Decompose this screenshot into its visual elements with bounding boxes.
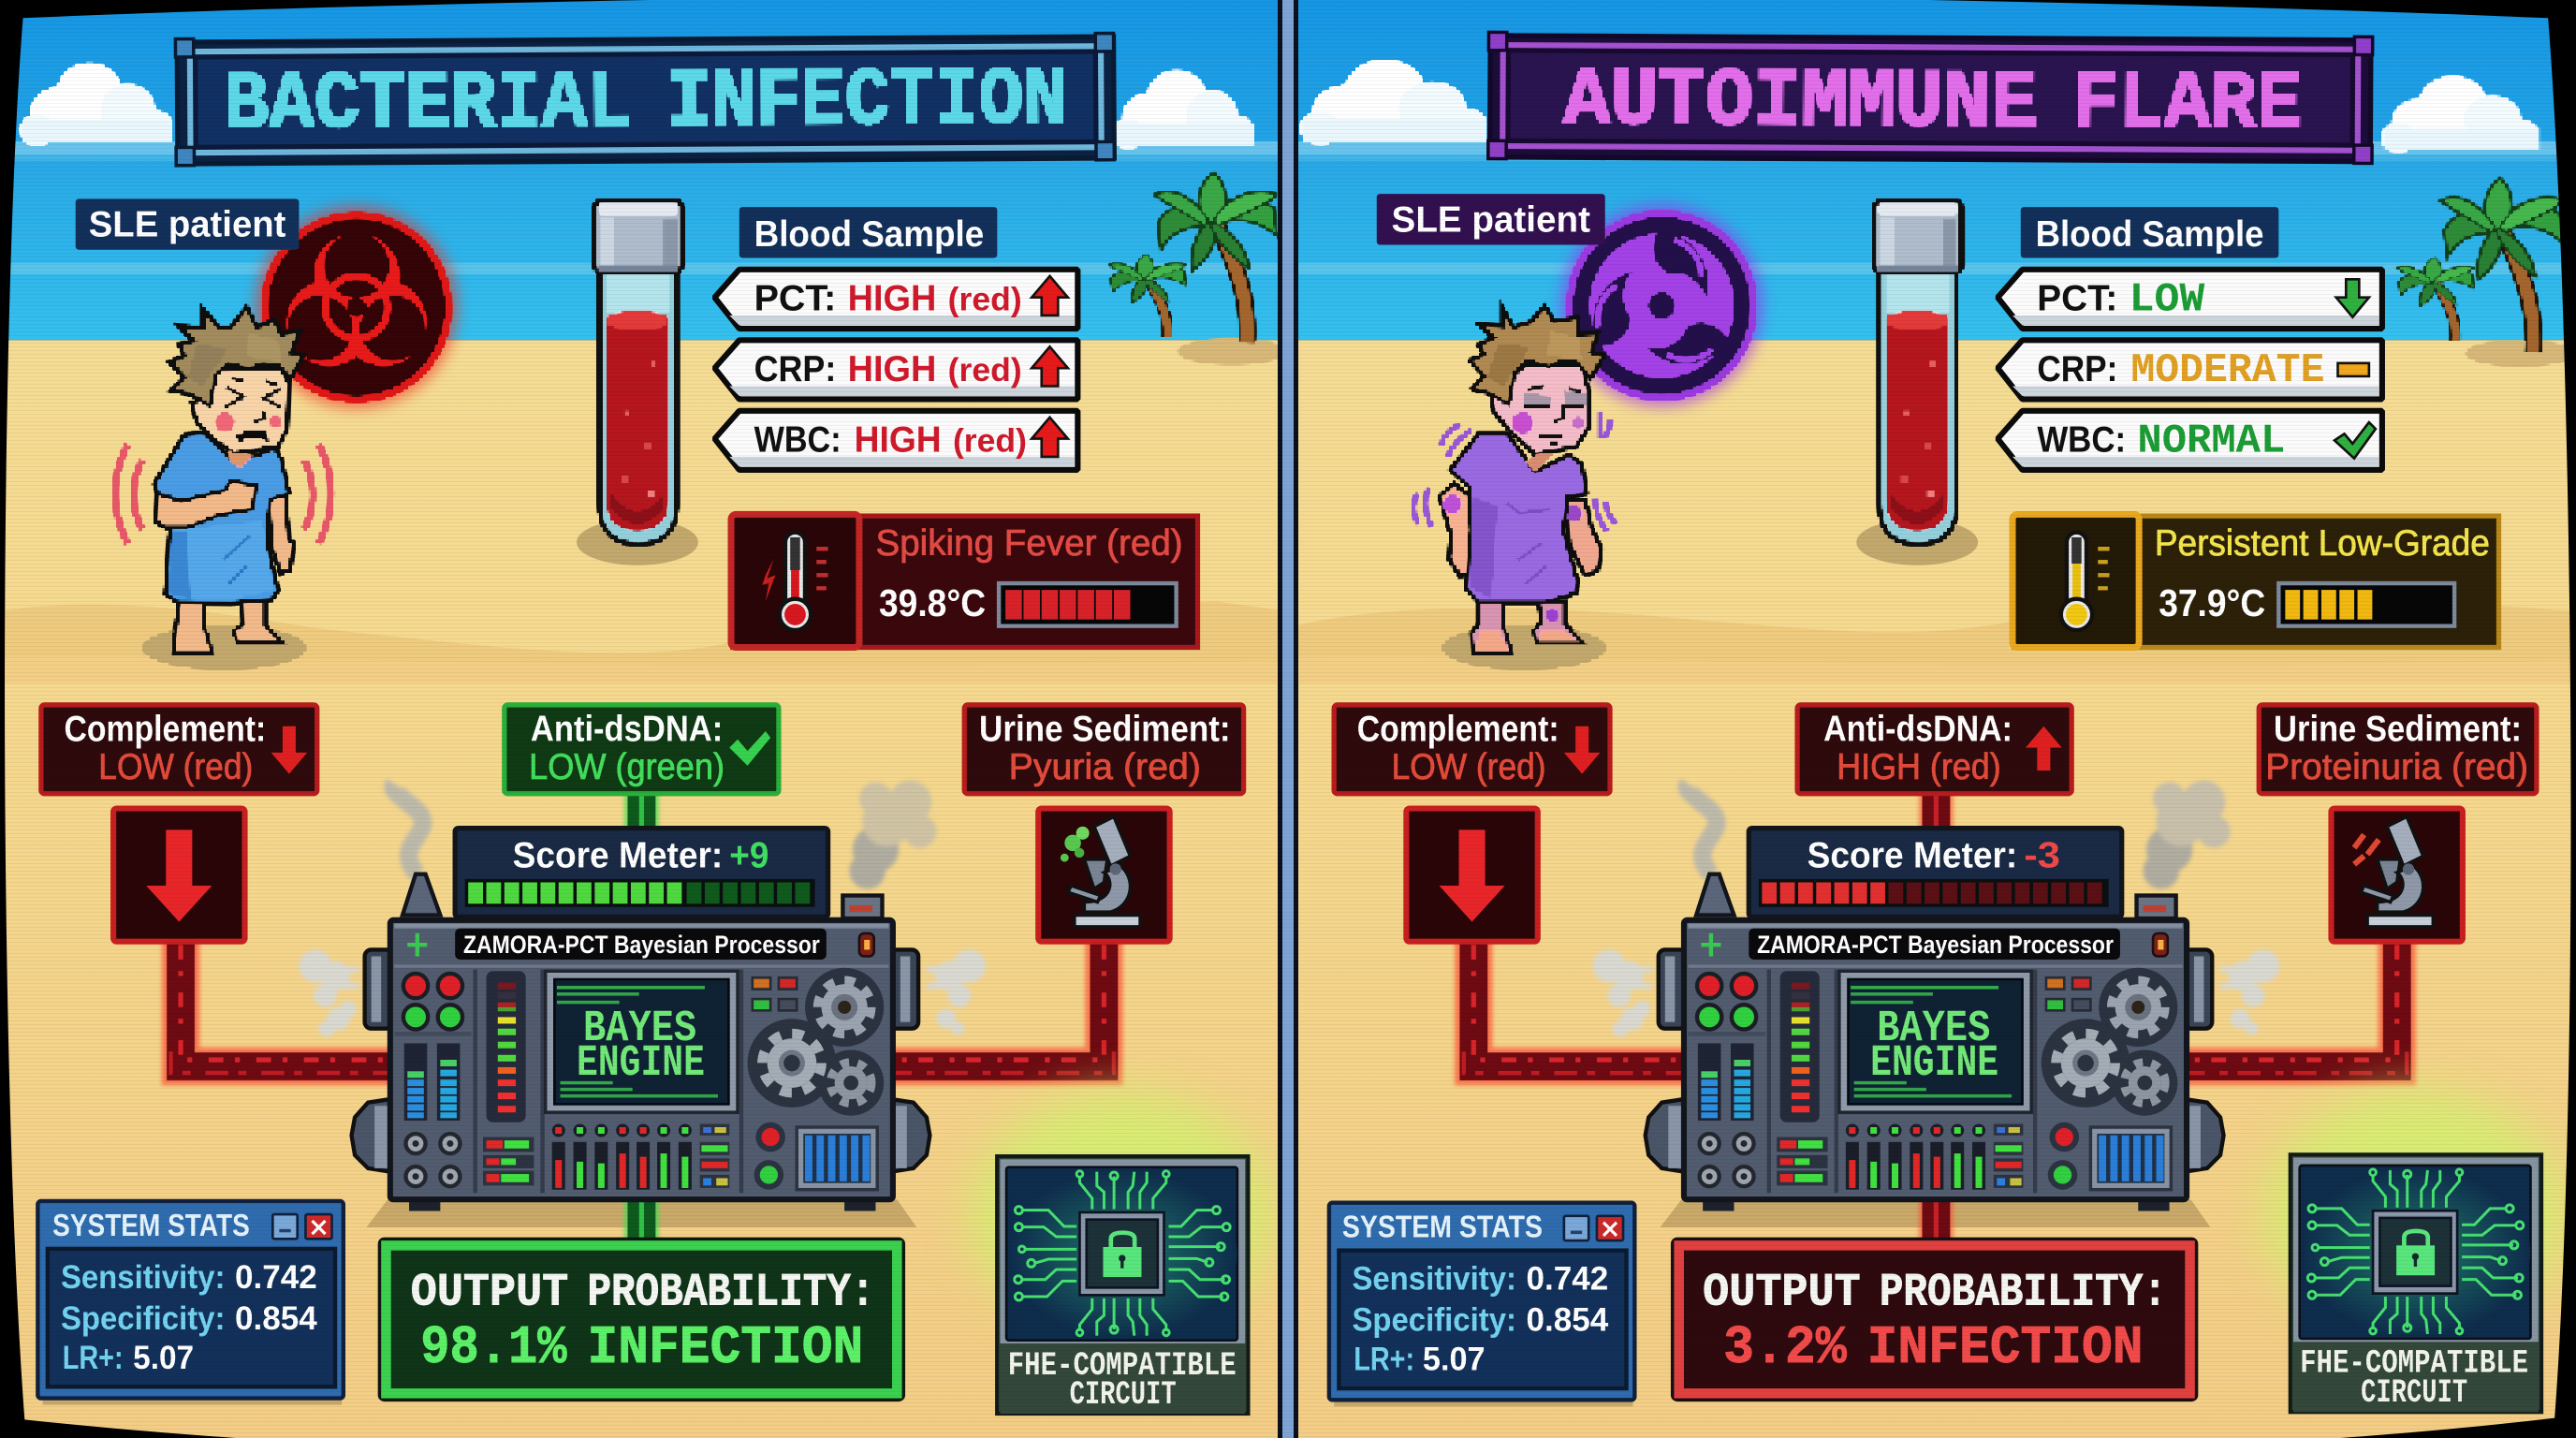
label: SLE patient (left): SLE patient [89,205,286,245]
tag: WBC high: WBC: [754,420,842,461]
machine: Bayes engine (right): ZAMORA-PCT Bayesian Processor [1757,930,2114,959]
panel: complement low (right) [1334,705,1610,794]
panel: anti-dsDNA high: HIGH (red) [1837,747,2001,787]
panel: urine sediment proteinuria: Urine Sediment: [2274,710,2522,750]
panel: FHE-compatible circuit (right): FHE-COMPATIBLE [2300,1345,2528,1383]
panel: anti-dsDNA low: LOW (green) [529,747,724,787]
icon: autoimmune swirl badge [1559,204,1764,407]
panel: system stats (left): 5.07 [133,1340,194,1376]
panel: system stats (left): Sensitivity: [61,1259,225,1296]
panel: output probability 98.1%: PROBABILITY: [587,1267,875,1319]
panel: FHE-compatible circuit (right): CIRCUIT [2361,1374,2467,1412]
panel: FHE-compatible circuit (left) [971,1093,1273,1414]
tag: CRP moderate: CRP: [2037,349,2117,389]
title: autoimmune flare [1488,32,2373,163]
conduit: right red connectors [1464,792,2407,1242]
panel: spiking fever [731,514,1197,648]
tag: WBC normal: WBC: [2037,420,2126,461]
tag: WBC normal: NORMAL [2137,418,2285,465]
icon: blood test tube (right) [1856,200,1978,565]
panel: system stats (right) [1329,1203,1634,1406]
tag: CRP high [714,340,1077,399]
panel: urine sediment pyuria [964,705,1244,794]
panel: output probability 98.1%: OUTPUT [411,1267,568,1319]
panel: anti-dsDNA low [505,705,779,794]
panel: complement low (right): Complement: [1357,710,1559,750]
center divider between the two scenarios [1278,0,1298,1438]
tag: CRP moderate: MODERATE [2130,347,2324,394]
panel: output probability 3.2%: INFECTION [1867,1318,2144,1379]
label: SLE patient (right) [1377,194,1605,245]
tag: CRP moderate [1998,340,2382,399]
title: bacterial infection [175,34,1114,166]
smoke and steam (right) [1593,781,2279,1036]
tag: WBC high: (red) [953,423,1027,460]
panel: system stats (left): Specificity: [61,1300,225,1337]
tag: PCT high: PCT: [754,279,836,319]
panel: output probability 3.2%: OUTPUT [1703,1267,1861,1319]
panel: persistent low-grade fever: 37.9°C [2159,581,2265,624]
title: bacterial infection: INFECTION [666,55,1068,150]
panel: output probability 98.1%: INFECTION [587,1318,863,1379]
panel: complement low (right): LOW (red) [1392,747,1546,787]
panel: system stats (left): 0.742 [235,1259,317,1296]
machine: Bayes engine (right): ENGINE [1870,1039,1998,1089]
tag: PCT high [714,270,1077,329]
tag: CRP high: HIGH [848,349,936,389]
label: blood sample (right): Blood Sample [2036,214,2264,255]
panel: system stats (right): SYSTEM STATS [1342,1211,1543,1245]
tag: CRP high: (red) [948,352,1022,389]
title: autoimmune flare: FLARE [2072,58,2303,152]
icon: yellow thermometer [2061,533,2110,630]
tag: WBC normal [1998,411,2382,470]
label: SLE patient (right): SLE patient [1392,199,1590,240]
panel: score meter -3: -3 [2024,836,2060,876]
panel: system stats (left): 0.854 [235,1300,317,1337]
panel: system stats (left): SYSTEM STATS [52,1209,250,1243]
panel: output probability 98.1% [379,1239,903,1400]
title: bacterial infection: BACTERIAL [223,57,633,153]
tag: PCT low: PCT: [2037,279,2117,319]
tag: WBC high [714,411,1077,470]
figure: feverish patient in blue gown [115,307,331,669]
panel: FHE-compatible circuit (right) [2264,1091,2566,1412]
panel: system stats (right): Sensitivity: [1352,1261,1516,1298]
panel: urine sediment pyuria: Urine Sediment: [979,710,1231,750]
panel: system stats (right): 0.854 [1526,1302,1609,1339]
panel: persistent low-grade fever: Persistent Low-Grade [2155,523,2490,564]
panel: urine sediment pyuria: Pyuria (red) [1009,747,1201,787]
machine: Bayes engine (right): BAYES [1877,1005,1990,1054]
clouds and palm trees: right [1299,60,2574,366]
background: left beach scene [0,0,1288,1438]
panel: system stats (left) [37,1201,344,1405]
panel: urine sediment proteinuria [2259,705,2537,794]
panel: spiking fever: Spiking Fever (red) [875,523,1183,564]
panel: complement low (left): Complement: [64,710,266,750]
panel: output probability 3.2%: PROBABILITY: [1880,1267,2167,1319]
machine: Bayes engine (left) [352,920,929,1211]
chimneys (right) [1696,874,2176,918]
tag: CRP high: CRP: [754,349,836,389]
conduit: left red connectors [171,936,1114,1073]
icon: biohazard badge [255,205,459,409]
clouds and palm trees: left [20,63,1286,365]
panel: FHE-compatible circuit (left): CIRCUIT [1070,1376,1177,1414]
panel: score meter +9: +9 [729,836,768,876]
panel: persistent low-grade fever [2012,514,2499,648]
panel: system stats (right): Specificity: [1352,1302,1516,1339]
panel: anti-dsDNA high [1797,705,2071,794]
panel: complement low (left): LOW (red) [98,747,253,787]
icon: microscope with green cells [1038,809,1170,942]
background: right beach scene [1288,0,2576,1438]
panel: system stats (left): LR+: [63,1340,124,1376]
icon: big down arrow (left) [113,809,245,942]
panel: system stats (right): 5.07 [1423,1342,1486,1378]
tag: PCT high: (red) [948,282,1022,318]
machine: Bayes engine (left): ENGINE [577,1039,705,1089]
machine: Bayes engine (left): BAYES [583,1005,696,1054]
panel: score meter +9 [455,829,828,917]
icon: big down arrow (right) [1406,809,1538,942]
tag: PCT low [1998,270,2382,329]
panel: output probability 3.2% [1673,1239,2197,1400]
panel: system stats (right): 0.742 [1526,1261,1608,1298]
panel: urine sediment proteinuria: Proteinuria (red) [2265,747,2528,787]
machine base shadow (right) [1661,1199,2210,1227]
panel: output probability 98.1%: 98.1% [420,1318,567,1379]
figure: fatigued patient in purple gown [1413,306,1616,669]
smoke and steam (left) [299,781,986,1036]
icon: blood test tube (left) [577,200,698,565]
panel: output probability 3.2%: 3.2% [1723,1318,1847,1379]
title: autoimmune flare: AUTOIMMUNE [1563,55,2038,151]
machine: Bayes engine (left): ZAMORA-PCT Bayesian Processor [463,930,820,959]
label: blood sample (left): Blood Sample [754,214,984,255]
panel: score meter +9: Score Meter: [513,836,723,876]
panel: anti-dsDNA high: Anti-dsDNA: [1823,710,2012,750]
chimneys (left) [402,874,882,918]
tag: WBC high: HIGH [855,420,942,461]
panel: score meter -3 [1749,829,2122,917]
panel: score meter -3: Score Meter: [1808,836,2017,876]
tag: PCT high: HIGH [848,279,936,319]
machine: Bayes engine (right) [1646,920,2224,1211]
panel: spiking fever: 39.8°C [879,581,986,624]
panel: anti-dsDNA low: Anti-dsDNA: [531,710,723,750]
icon: red thermometer [762,533,828,630]
panel: FHE-compatible circuit (left): FHE-COMPATIBLE [1008,1347,1237,1385]
machine base shadow (left) [366,1199,916,1227]
panel: system stats (right): LR+: [1354,1342,1414,1378]
icon: microscope with red casts [2331,809,2463,942]
tag: PCT low: LOW [2130,277,2205,324]
conduit: left green center connector [624,792,659,1242]
panel: complement low (left) [41,705,317,794]
